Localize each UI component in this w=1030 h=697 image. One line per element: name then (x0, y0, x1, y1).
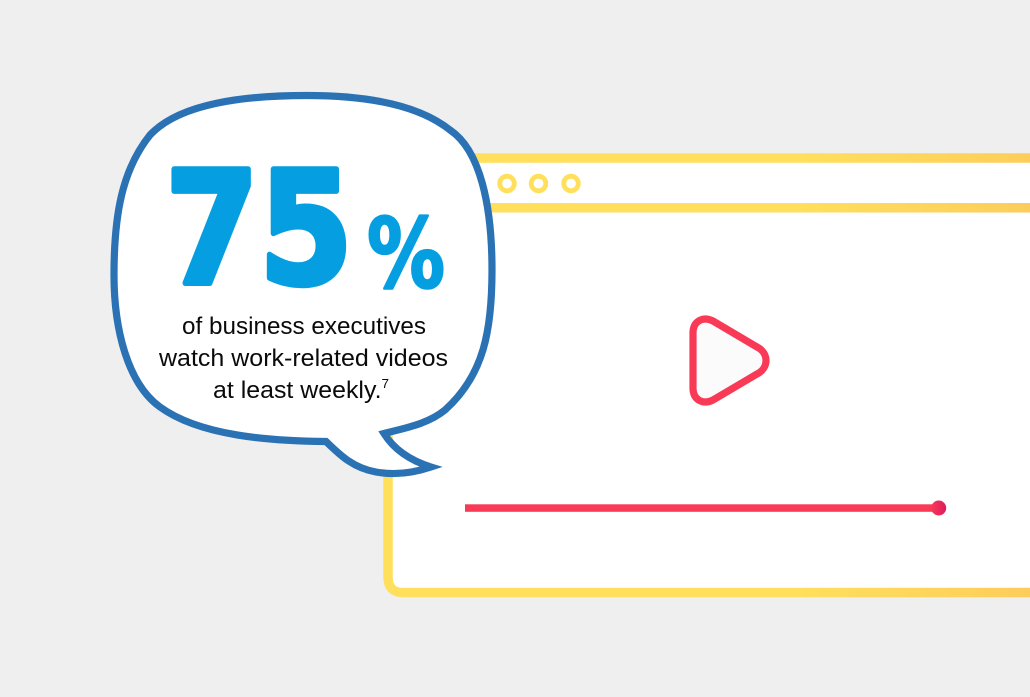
video player window (388, 158, 1030, 592)
icon: play button (693, 319, 766, 402)
window frame (388, 158, 1030, 592)
percent sign: % (367, 198, 445, 310)
big stat: 75% (165, 138, 445, 320)
title bar divider (440, 203, 1030, 212)
caption text: watch work-related videos (158, 345, 448, 372)
caption text: 7 (381, 376, 389, 391)
window control dots (500, 176, 578, 191)
caption text: of business executives (182, 313, 426, 340)
number 75: 75 (165, 138, 353, 320)
caption text: at least weekly. (213, 377, 375, 404)
speech bubble (114, 96, 492, 474)
caption text (158, 313, 448, 404)
progress bar (465, 500, 946, 516)
